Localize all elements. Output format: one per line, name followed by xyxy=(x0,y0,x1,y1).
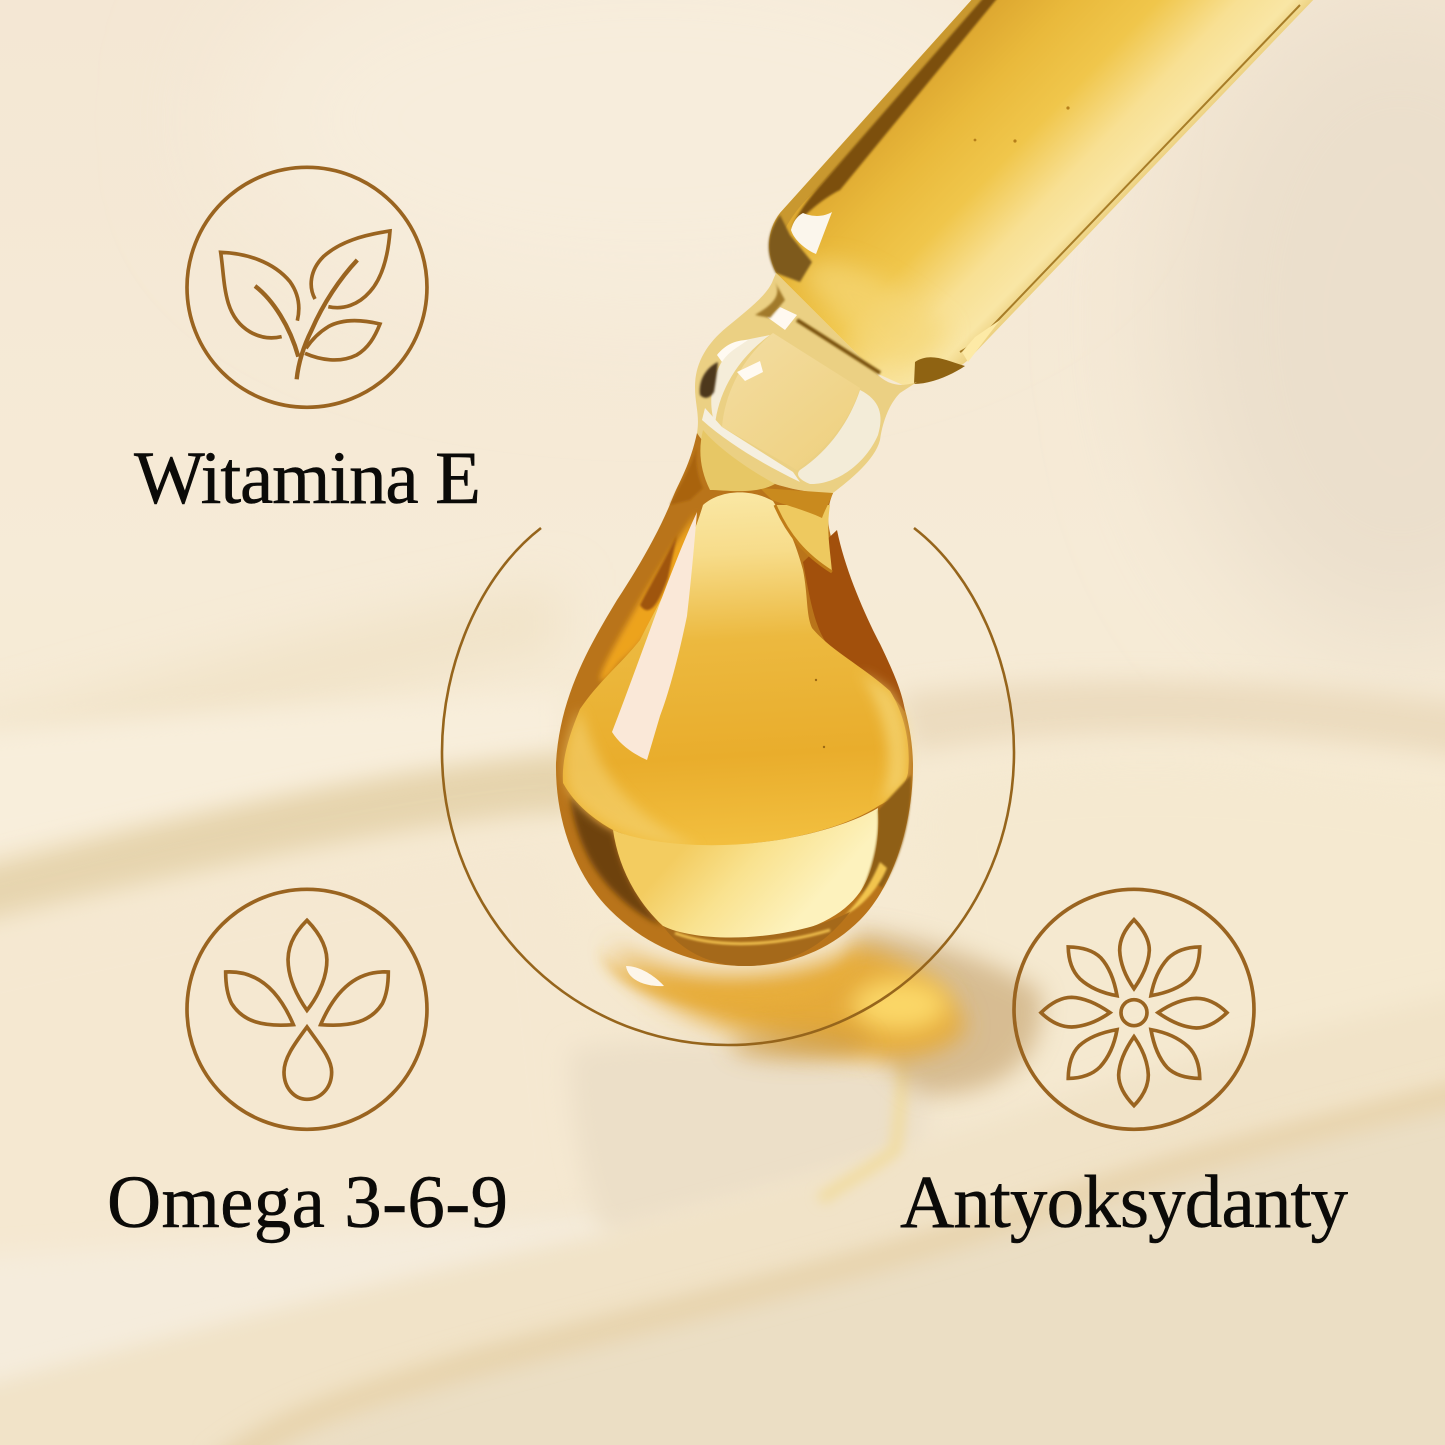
dark reflection in bulb xyxy=(700,362,718,398)
lower right glint xyxy=(845,862,887,915)
light flare in bulb xyxy=(717,340,763,381)
dark left stripe of tube xyxy=(792,0,1000,228)
neck xyxy=(695,273,917,493)
stem xyxy=(255,260,357,379)
thin arc around the drop xyxy=(442,528,1014,1045)
amber under the bulb xyxy=(760,488,833,518)
bulb bottom rim xyxy=(702,408,800,482)
flower center xyxy=(1121,1000,1147,1026)
top petal xyxy=(288,920,327,1010)
upper-left dark band xyxy=(640,535,677,610)
specks xyxy=(815,679,817,681)
drop shadow and golden caustic under the drop xyxy=(600,930,1042,1095)
thin brown line on right edge xyxy=(960,5,1300,352)
right amber band xyxy=(803,530,905,712)
lower left dark pocket xyxy=(570,795,663,926)
left petal xyxy=(226,972,293,1025)
right leaf xyxy=(311,231,390,308)
lower bright lens xyxy=(613,808,878,942)
glass bulb rim: lower right xyxy=(798,390,881,484)
highlight on shoulder xyxy=(791,212,832,254)
pale end of tube xyxy=(800,261,950,365)
label: Witamina E: Witamina E xyxy=(134,437,481,520)
left amber strip xyxy=(670,447,703,505)
upper yellow under the bulb xyxy=(700,430,775,491)
lower leaf xyxy=(305,321,380,360)
glass bulb rim: left xyxy=(711,335,770,425)
bubbles xyxy=(1066,106,1070,110)
end highlight and dark pocket xyxy=(914,357,965,384)
badge: Witamina E icon xyxy=(187,167,427,407)
flower petals xyxy=(1041,920,1227,1106)
label: Omega 3-6-9: Omega 3-6-9 xyxy=(107,1161,508,1244)
bottom edge band xyxy=(663,912,850,966)
right petal xyxy=(321,972,388,1025)
neck light highlight xyxy=(767,307,797,330)
neck shading xyxy=(755,282,785,318)
golden drop interior xyxy=(563,492,909,847)
pipette xyxy=(695,0,1318,493)
tail inside the drop xyxy=(775,505,832,572)
lower right glass edge xyxy=(860,775,911,896)
oil drop xyxy=(556,430,913,966)
pale rim of interior xyxy=(564,709,700,848)
neck dark line xyxy=(797,320,880,373)
badge: Omega 3-6-9 icon xyxy=(187,889,427,1129)
glass tube xyxy=(769,0,1318,386)
white highlight sliver xyxy=(612,512,697,760)
drop outer shape xyxy=(556,433,913,966)
glass bulb interior xyxy=(722,333,860,470)
shoulder of tube xyxy=(769,215,812,282)
outer gold band of tube xyxy=(775,0,992,235)
label: Antyoksydanty: Antyoksydanty xyxy=(900,1161,1348,1244)
badge: Antyoksydanty icon xyxy=(1014,889,1254,1129)
left leaf xyxy=(221,252,299,338)
oil droplet xyxy=(284,1027,332,1099)
upper-left glow band xyxy=(600,512,697,681)
